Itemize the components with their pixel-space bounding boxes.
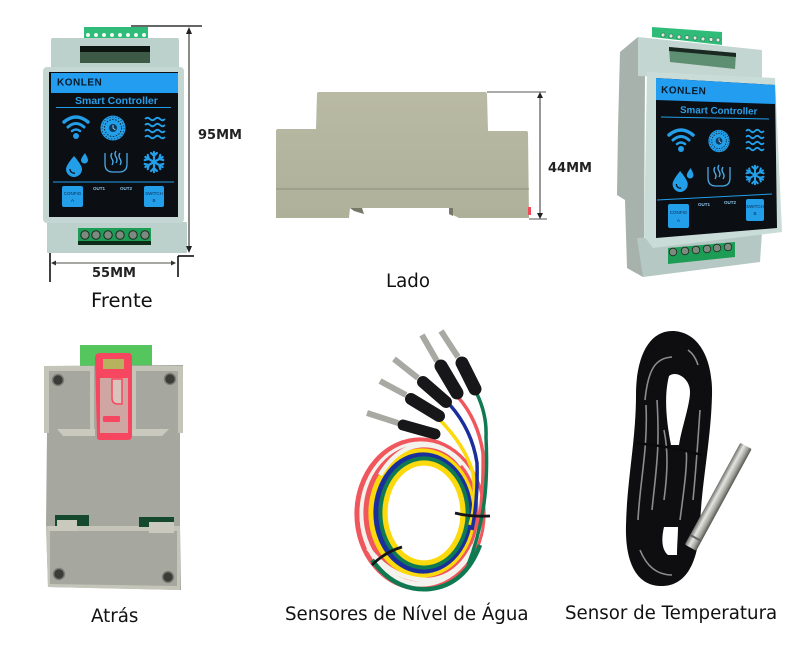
icon: heater <box>105 151 127 172</box>
height dimension 95MM <box>131 26 242 253</box>
touch panel <box>49 72 178 217</box>
left tab <box>48 520 77 531</box>
coiled wires <box>357 440 483 588</box>
switch button <box>144 186 164 207</box>
lower recess frame <box>46 526 180 590</box>
height dimension 44MM: 44MM <box>548 161 592 176</box>
panel: front view <box>43 26 242 312</box>
upper right recess <box>132 366 183 433</box>
icon: dial <box>708 130 730 152</box>
switch button <box>746 199 764 221</box>
main housing <box>43 67 184 223</box>
display window <box>669 47 736 69</box>
icon: heater <box>708 165 730 186</box>
red clip edge <box>528 207 531 215</box>
output label 2: OUT2 <box>120 186 132 191</box>
label: water level sensors: Sensores de Nível de Água <box>285 603 529 625</box>
panel: back view <box>44 345 183 627</box>
outer green and white bottom strands <box>368 445 480 589</box>
cable tie <box>635 443 702 455</box>
width dimension 55MM: 55MM <box>92 266 136 281</box>
zip ties <box>372 513 490 565</box>
width dimension 55MM <box>50 253 194 282</box>
product title: Smart Controller <box>75 95 158 107</box>
left circuit slot <box>55 515 89 526</box>
output label 1: OUT1 <box>93 186 105 191</box>
panel: side view <box>276 92 592 292</box>
panel: perspective view <box>617 27 782 277</box>
right shelf <box>132 429 169 436</box>
config button: A <box>71 198 74 203</box>
blue header <box>51 73 178 93</box>
output label 1: OUT1 <box>698 202 710 207</box>
left side face <box>617 37 645 277</box>
upper housing <box>638 37 762 80</box>
probe 3 <box>394 359 446 402</box>
probe 5 <box>441 331 475 389</box>
housing seam <box>276 188 529 190</box>
right tab <box>149 522 174 533</box>
back housing <box>44 365 183 590</box>
lower housing <box>637 232 762 277</box>
icon: dial <box>100 116 126 140</box>
display window <box>80 46 150 63</box>
right circuit slot <box>139 517 174 527</box>
housing screws <box>52 374 176 582</box>
switch button: B <box>152 198 156 203</box>
label: Atrás: Atrás <box>91 606 138 627</box>
config button: CONFIG <box>670 210 688 215</box>
label: Frente: Frente <box>91 289 153 312</box>
icon: waves <box>145 118 165 138</box>
height dimension 44MM <box>487 92 592 219</box>
green connector <box>80 345 152 367</box>
label: temperature sensor: Sensor de Temperatura <box>565 603 777 624</box>
wire leads <box>438 394 487 565</box>
probe 1 <box>367 413 435 434</box>
probe 2 <box>380 381 439 416</box>
cable highlights <box>638 350 700 575</box>
brand name: KONLEN <box>661 85 706 97</box>
label: Lado: Lado <box>386 271 430 292</box>
icon: wifi <box>64 117 88 139</box>
steel probe <box>685 443 752 551</box>
bottom terminal block <box>78 228 151 245</box>
panel: temperature sensor <box>565 331 777 624</box>
config button <box>62 186 83 207</box>
side housing <box>276 92 529 218</box>
bottom terminal block <box>668 242 735 264</box>
panel: water level sensors <box>285 331 529 625</box>
product title: Smart Controller <box>680 105 758 118</box>
switch button: B <box>753 211 757 216</box>
touch panel <box>656 78 777 238</box>
icon: water drops <box>673 168 693 192</box>
icon: snowflake <box>746 166 764 184</box>
main housing <box>644 72 782 248</box>
switch button: SWITCH <box>145 191 163 196</box>
output label 2: OUT2 <box>724 200 736 205</box>
icon: wifi <box>669 130 693 152</box>
icon: snowflake <box>144 152 164 172</box>
switch button: SWITCH <box>746 204 764 209</box>
left shelf <box>57 429 95 436</box>
black cable coil <box>626 331 712 586</box>
green top connector <box>84 27 148 39</box>
green top connector <box>652 27 722 45</box>
lower housing <box>47 222 187 253</box>
upper left recess <box>44 366 94 433</box>
red DIN clip <box>95 353 132 440</box>
upper housing <box>51 38 179 70</box>
brand name: KONLEN <box>57 78 102 88</box>
icon: waves <box>746 130 764 150</box>
rail clip shadow <box>350 208 453 216</box>
blue header <box>656 78 775 104</box>
config button <box>668 204 689 228</box>
config button: CONFIG <box>64 191 82 196</box>
height dimension 95MM: 95MM <box>198 128 242 143</box>
probe 4 <box>422 335 457 393</box>
config button: A <box>677 218 680 223</box>
icon: water drops <box>66 153 88 177</box>
